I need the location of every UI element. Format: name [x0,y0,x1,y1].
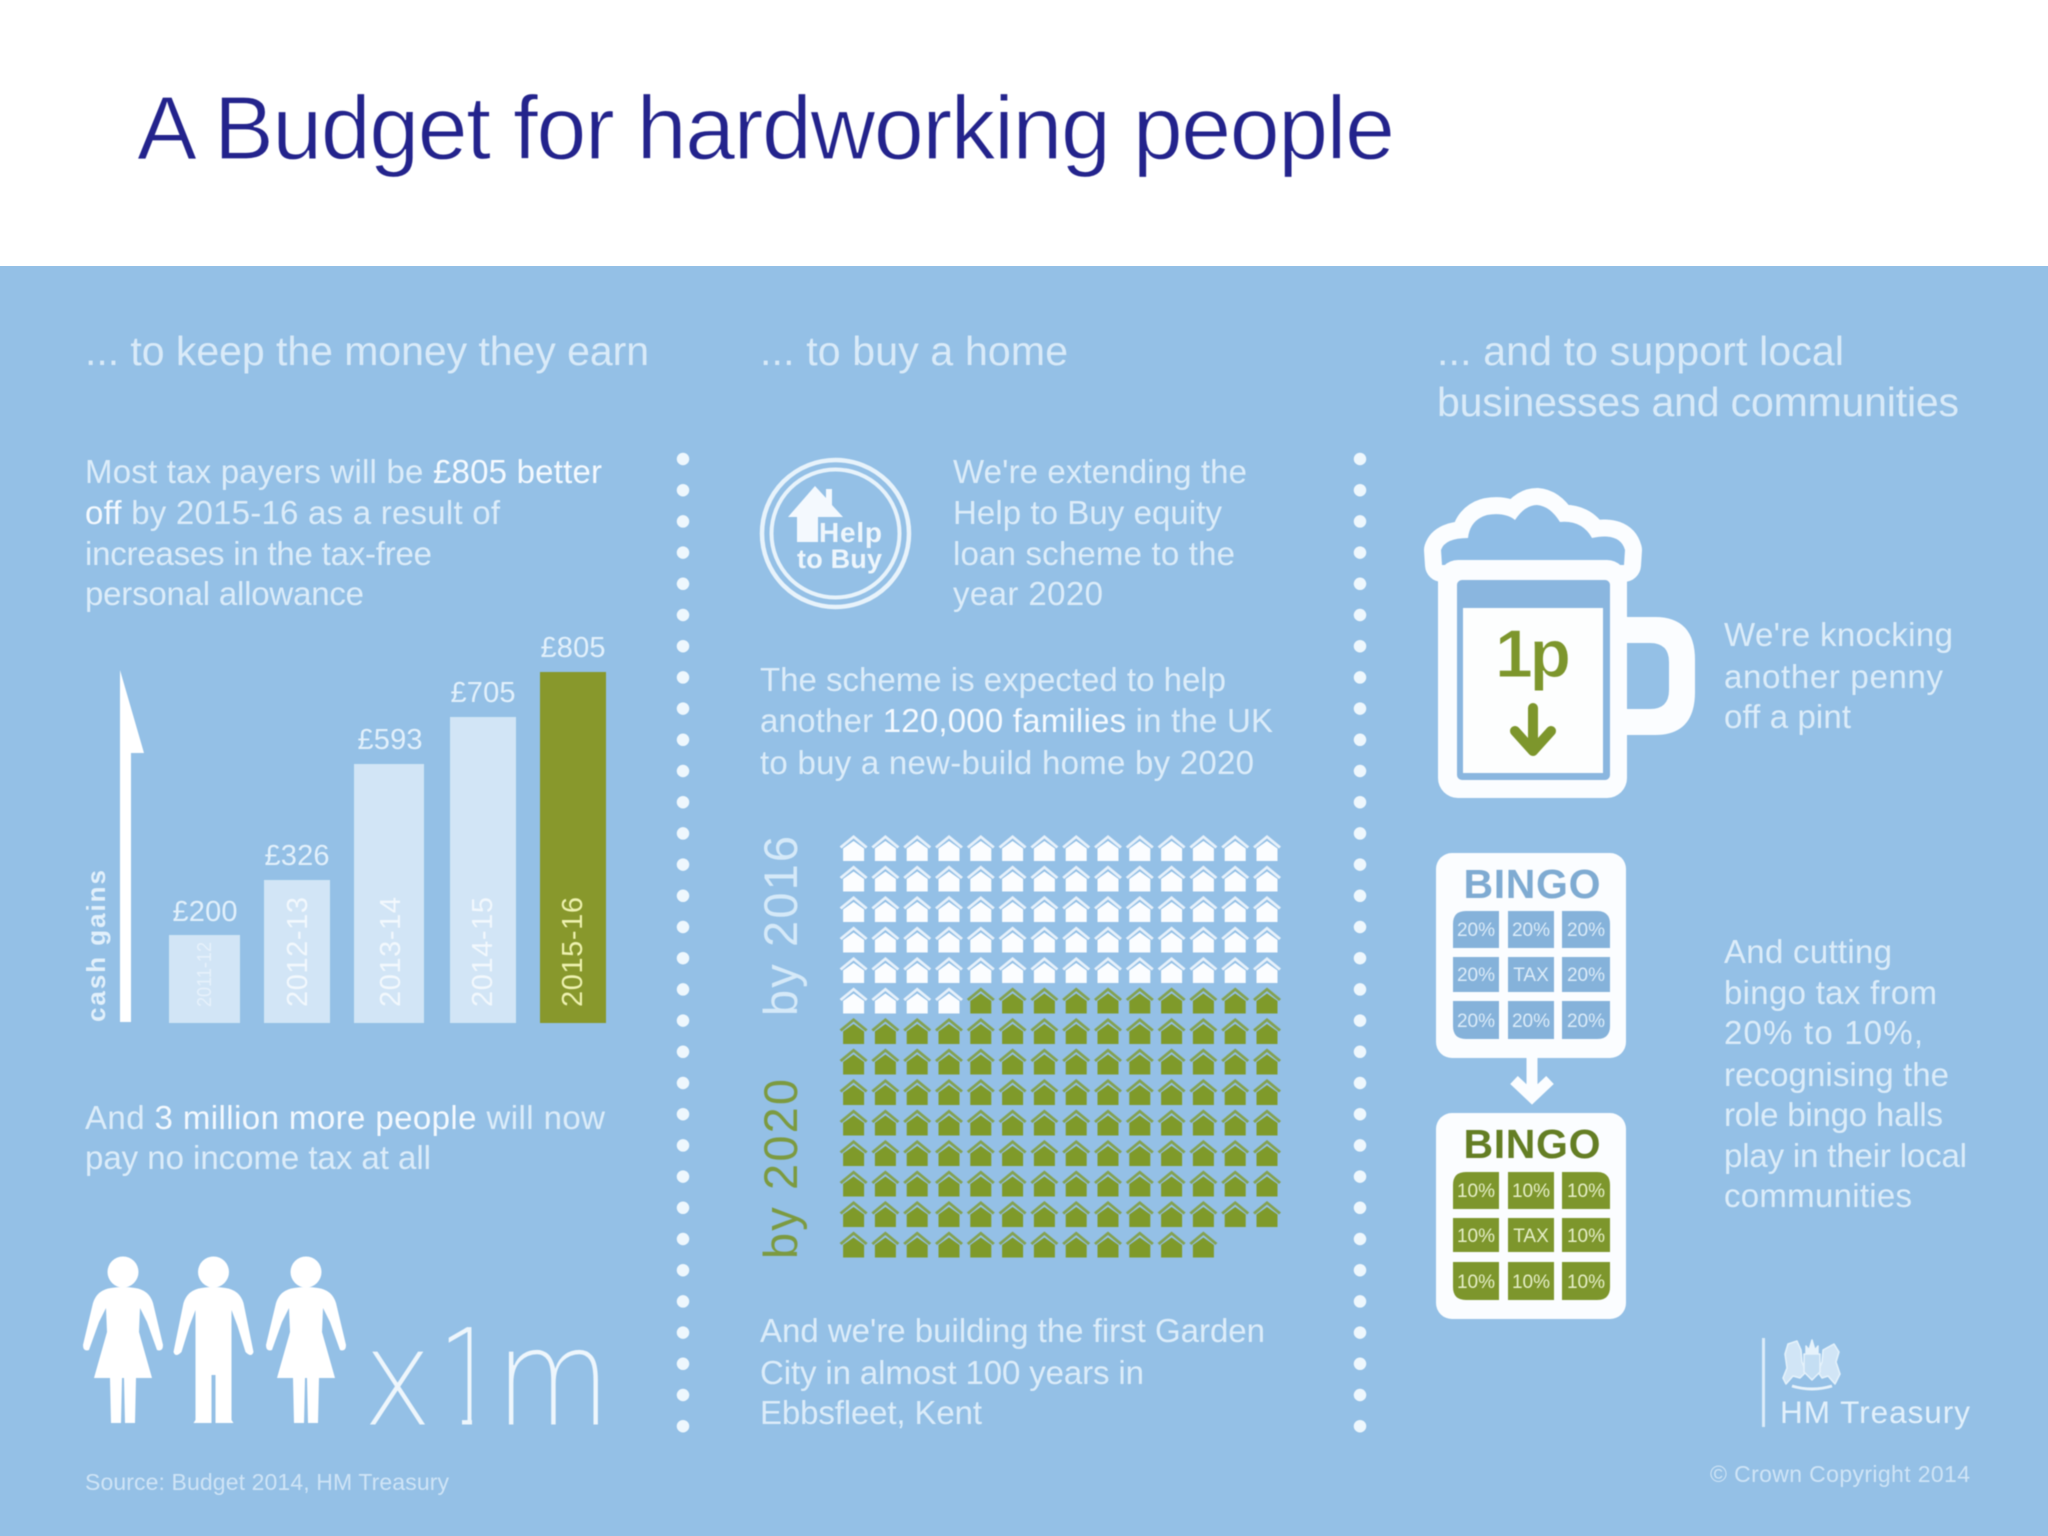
bar chart: cash gains [81,632,606,1023]
icon: Help to Buy roundel [762,460,909,607]
icon: bingo card 10%: 10% [1457,1181,1495,1202]
icon: bingo card 10%: 10% [1512,1272,1550,1293]
multiplier: x1m: x [362,1300,432,1457]
panel: keep the money [81,328,649,1495]
icon: bingo card 10%: 10% [1567,1272,1605,1293]
multiplier: x1m: m [495,1300,611,1457]
bar 2013-14: £593 [358,724,422,756]
text: bingo tax: And cutting [1724,933,1892,970]
icon: bingo card 10% [1436,1113,1626,1319]
icon: bingo card 20%: BINGO [1464,861,1600,907]
text: 120,000 families: to buy a new-build home by 2020 [760,744,1254,781]
heading: local businesses [1437,328,1959,425]
title: A Budget for hardworking people [137,79,1395,179]
bar 2014-15 [450,677,516,1023]
icon: bingo card 20%: 20% [1567,1011,1605,1032]
copyright note: © Crown Copyright 2014 [1710,1461,1970,1487]
icon: bingo card 20%: 20% [1457,920,1495,941]
icon: bingo card 20%: 20% [1567,965,1605,986]
arrow: bingo tax down [1514,1055,1550,1097]
icon: bingo card 10%: 10% [1567,1226,1605,1247]
text: better off: Most tax payers will be £805 better [85,453,602,490]
text: garden city: Ebbsfleet, Kent [760,1394,982,1431]
heading: local businesses: businesses and communities [1437,379,1959,425]
bar 2015-16 [540,632,606,1023]
divider right [1354,459,1366,1427]
axis arrow [120,670,144,1022]
bar 2011-12: 2011-12 [194,942,216,1007]
icon: bingo card 10%: 10% [1457,1226,1495,1247]
text: no income tax: And 3 million more people will now [85,1099,605,1136]
bar 2013-14: 2013-14 [375,897,407,1007]
icon: bingo card 10%: 10% [1567,1181,1605,1202]
text: 120,000 families: The scheme is expected to help [760,661,1226,698]
icon: bingo card 10%: 10% [1457,1272,1495,1293]
bar 2012-13 [264,840,330,1023]
bar 2011-12: £200 [172,896,238,928]
text: bingo tax: bingo tax from [1724,974,1937,1011]
label: by 2020: by 2020 [754,1079,807,1259]
icon: Help to Buy roundel: Help [819,517,882,548]
bar 2014-15: £705 [450,677,516,709]
icon: bingo card 20%: 20% [1457,965,1495,986]
crest [1783,1340,1840,1389]
text: extending the scheme: year 2020 [953,575,1103,612]
text: better off [85,453,602,612]
bar 2014-15: 2014-15 [467,897,499,1007]
icon: bingo card 20%: 20% [1512,920,1550,941]
axis label: cash gains [81,870,111,1022]
heading: buy a home: ... to buy a home [760,328,1068,374]
logo: HM Treasury: HM Treasury [1780,1394,1970,1430]
divider left [677,459,689,1427]
bar 2015-16: £805 [540,632,606,664]
icon: bingo card 20%: TAX [1513,965,1549,986]
icon: bingo card 10%: 10% [1512,1181,1550,1202]
text: no income tax: pay no income tax at all [85,1139,431,1176]
icon: bingo card 10%: BINGO [1464,1121,1600,1167]
text: bingo tax: communities [1724,1177,1912,1214]
icon: Help to Buy roundel: to Buy [797,544,882,574]
icon: bingo card 20%: 20% [1457,1011,1495,1032]
text: 120,000 families [760,661,1273,781]
icon: bingo card 10%: TAX [1513,1226,1549,1247]
source note: Source: Budget 2014, HM Treasury [85,1469,450,1495]
bar 2013-14 [354,724,424,1023]
mug label: 1p: 1p [1495,616,1571,692]
text: bingo tax: 20% to 10%, [1724,1014,1923,1051]
text: garden city: And we're building the first Garden [760,1312,1265,1349]
text: penny off a pint [1724,616,1953,735]
icon: bingo card 20%: 20% [1512,1011,1550,1032]
text: penny off a pint: another penny [1724,658,1944,695]
icon: three people [83,1256,346,1423]
text: penny off a pint: We're knocking [1724,616,1953,653]
text: extending the scheme [953,453,1247,612]
text: better off: personal allowance [85,575,364,612]
mug arrow [1515,708,1551,751]
icon: bingo card 20%: 20% [1567,920,1605,941]
logo: HM Treasury [1762,1338,1970,1430]
bar 2015-16: 2015-16 [557,897,589,1007]
bar 2012-13: £326 [264,840,330,872]
text: bingo tax [1724,933,1967,1214]
label: by 2016: by 2016 [754,836,807,1016]
text: better off: increases in the tax-free [85,535,432,572]
heading: local businesses: ... and to support local [1437,328,1844,374]
text: bingo tax: recognising the [1724,1056,1949,1093]
icon: bingo card 20% [1436,853,1626,1058]
text: better off: off by 2015-16 as a result of [85,494,501,531]
text: garden city: City in almost 100 years in [760,1354,1144,1391]
icon: beer mug [1438,505,1695,798]
text: garden city [760,1312,1265,1431]
house grid: by 2016 [840,835,1281,1014]
panel: buy a home [754,328,1281,1431]
text: extending the scheme: Help to Buy equity [953,494,1222,531]
bar 2011-12 [169,896,240,1023]
panel: local businesses [1436,328,1970,1487]
heading: keep the money: ... to keep the money they earn [85,328,649,374]
multiplier: x1m: 1 [438,1300,498,1457]
text: bingo tax: play in their local [1724,1137,1967,1174]
bar 2012-13: 2012-13 [282,897,314,1007]
house grid: by 2020 [840,988,1281,1258]
text: no income tax [85,1099,605,1176]
text: bingo tax: role bingo halls [1724,1096,1943,1133]
text: extending the scheme: We're extending the [953,453,1247,490]
text: extending the scheme: loan scheme to the [953,535,1235,572]
text: 120,000 families: another 120,000 families in the UK [760,702,1273,739]
text: penny off a pint: off a pint [1724,698,1851,735]
multiplier: x1m [370,1326,598,1425]
